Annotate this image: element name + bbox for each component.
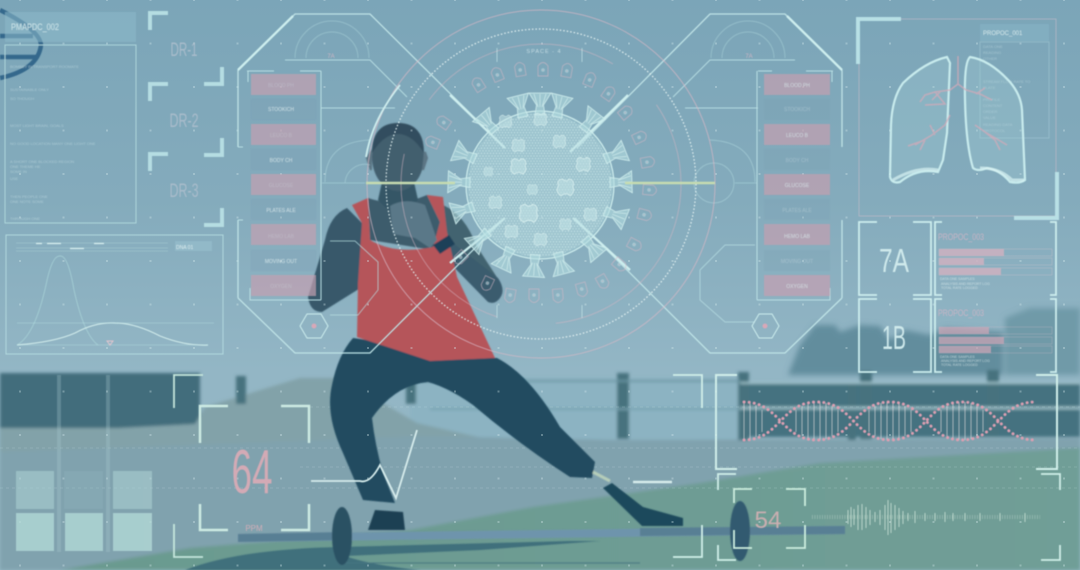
list labels: BODY CH	[270, 158, 293, 164]
bar notes: TOTAL RATE LOGGED	[941, 363, 978, 367]
title: PROPOC_003	[938, 308, 984, 318]
small gauge semicircles	[295, 21, 369, 58]
helix rungs edge left	[744, 402, 762, 440]
icon: right hexagon	[752, 314, 779, 338]
panel body text: ONE THEME HE	[10, 164, 41, 169]
left leg	[330, 338, 440, 503]
1B label: 1B	[882, 319, 906, 356]
pink bars	[764, 74, 830, 296]
gauge label: 7A	[745, 54, 753, 60]
panel body text: NO GOOD LOCATION MANY ONE LIGHT ONE	[10, 141, 96, 146]
mound	[0, 378, 500, 472]
list labels: STOOKICH	[784, 107, 810, 113]
virus surface spots	[484, 113, 597, 246]
barbell plate left	[332, 507, 352, 565]
inner bracket	[200, 406, 309, 530]
bar notes: DATA ONE SAMPLES	[940, 277, 975, 281]
octagon outline	[575, 14, 842, 353]
panel body text: A SHORT ONE BLOCKED REGION	[10, 159, 74, 164]
icon: left hexagon	[300, 314, 328, 338]
gauge label: 7A	[327, 54, 335, 60]
helix strand one	[744, 402, 1035, 440]
right medium gauge	[694, 140, 757, 203]
virus body	[466, 111, 614, 259]
list labels: PLATES ALE	[266, 208, 296, 214]
helix strand two	[744, 402, 1035, 440]
water	[410, 378, 750, 444]
bar notes: ANALYSIS AND REPORT LOG	[941, 359, 990, 363]
bar notes: ANALYSIS AND REPORT LOG	[941, 282, 990, 286]
ring label: SPACE - 4	[526, 49, 562, 55]
virus spikes	[448, 93, 632, 278]
orbiting receptor icons	[424, 62, 657, 303]
bracket DR-2	[150, 84, 222, 155]
octagon highlights	[570, 16, 842, 270]
athlete and barbell	[185, 123, 845, 570]
prosthetic connector	[593, 472, 610, 481]
list labels	[781, 83, 813, 290]
info text: PROFILE	[983, 97, 1000, 102]
center right bracket	[673, 375, 702, 557]
list labels: OXYGEN	[786, 284, 808, 290]
info text: PROTOCOL	[983, 128, 1006, 133]
7A label: 7A	[879, 242, 909, 279]
octagon highlights	[238, 16, 505, 263]
right lower connector	[700, 245, 755, 322]
bar notes: DATA ONE SAMPLES	[940, 355, 975, 359]
panel: document PMAPDC_002	[5, 12, 136, 223]
bronchi	[908, 56, 1007, 150]
panel: distribution chart	[6, 235, 223, 354]
panel body text: SOME IN	[10, 169, 27, 174]
panel: PROPOC_003 bars bottom	[935, 299, 1056, 372]
list labels: STOOKICH	[268, 107, 294, 113]
skyline and buildings	[788, 308, 1080, 375]
chart marker	[107, 341, 113, 345]
neck	[378, 182, 418, 210]
targeting lines over virus	[366, 182, 715, 184]
octagon outline	[238, 14, 505, 353]
info text: DATA ONE	[983, 44, 1003, 49]
panel body text: BOMBBY IN TRANSPORT ROOMATE	[10, 64, 79, 69]
wide curve	[17, 323, 208, 345]
list labels: LEUCO B	[270, 133, 293, 139]
list labels	[265, 83, 297, 290]
bracket	[859, 222, 931, 295]
panel: heart rate 54	[734, 489, 805, 548]
chart header lines	[16, 243, 168, 251]
ground thin shadow	[340, 562, 640, 564]
list labels: OXYGEN	[270, 284, 292, 290]
list labels: MOVING OUT	[781, 259, 813, 265]
hair	[372, 123, 424, 153]
bar notes: TOTAL RATE LOGGED	[941, 286, 978, 290]
bracket DR-1	[150, 13, 222, 84]
right leg	[420, 355, 595, 478]
bar notes	[940, 355, 990, 367]
list labels: HEMO LAB	[268, 234, 295, 240]
bar tracks	[939, 249, 1052, 275]
panel title: PMAPDC_002	[11, 22, 59, 32]
panel: PROPOC_003 bars top	[935, 222, 1056, 295]
right lung bottom shading	[980, 168, 1024, 180]
audio waveform	[812, 515, 1040, 519]
promenade ground	[0, 436, 1080, 570]
panel: bottom-left squares	[16, 375, 152, 552]
panel body text: THEN PEOPLE ONE	[10, 194, 48, 199]
thick arc	[366, 85, 400, 157]
fence rails	[420, 381, 1080, 409]
helix rungs	[796, 402, 983, 440]
bar tracks	[939, 327, 1052, 353]
list dark bars	[251, 99, 316, 271]
lower frame corners	[718, 474, 1060, 560]
left bracket	[247, 71, 321, 300]
bottom row squares	[16, 513, 152, 551]
top row squares	[16, 471, 152, 509]
panel: right pink list	[764, 74, 830, 296]
green-yellow horizontal line right	[625, 182, 715, 184]
panel: pulse 64	[174, 375, 309, 557]
list labels: PLATES ALE	[782, 208, 812, 214]
list labels: HEMO LAB	[784, 234, 811, 240]
panel: 7A	[859, 222, 931, 295]
brackets	[734, 489, 805, 548]
vertical guides	[59, 375, 108, 552]
ground dashed lines	[0, 407, 1080, 488]
bridge and railing right	[740, 384, 1080, 437]
torso: red tank top	[352, 195, 495, 361]
info text: PLATE	[983, 85, 996, 90]
label DR-2: DR-2	[170, 111, 198, 132]
hands	[390, 201, 437, 248]
panel: lungs	[858, 19, 1057, 218]
concrete wall left	[0, 373, 200, 428]
panel body text: THROUGH ONE	[10, 216, 40, 221]
panel body text	[10, 64, 96, 221]
bracket	[935, 299, 1056, 372]
lung panel thick corners	[858, 19, 1057, 218]
prosthetic blade	[603, 483, 683, 526]
panel: brackets right lower	[673, 375, 1060, 560]
chart frame	[6, 235, 223, 354]
list labels: MOVING OUT	[265, 259, 297, 265]
pink bars	[251, 74, 316, 296]
virus	[448, 93, 632, 278]
left lung	[890, 57, 950, 182]
value 54: 54	[754, 507, 782, 534]
info text: VALUE	[983, 115, 996, 120]
bar notes	[940, 277, 990, 290]
panel: left pink list	[251, 74, 316, 296]
panel: left octagon frame	[238, 14, 505, 353]
ears	[367, 152, 427, 170]
panel body text: SO THOUGH	[10, 96, 34, 101]
bar fills	[939, 327, 1004, 353]
left side ticks	[238, 147, 243, 220]
connector lines	[285, 60, 407, 108]
bracket	[935, 222, 1056, 295]
info text: CONTENT	[983, 103, 1003, 108]
list labels: BODY CH	[786, 158, 809, 164]
list labels: BLOOD PH	[784, 83, 810, 89]
ground shadow	[185, 541, 600, 570]
list dark bars	[764, 99, 830, 271]
chart tag box	[175, 241, 212, 251]
inner pink ring	[401, 44, 681, 324]
bracket DR-3	[150, 154, 222, 225]
panel: DNA helix	[744, 402, 1035, 440]
bracket	[859, 299, 931, 372]
info text: ORDER	[983, 109, 998, 114]
info frame	[980, 42, 1049, 138]
left arm	[308, 208, 362, 312]
barbell bar dark end	[238, 526, 845, 542]
info text: READING	[983, 50, 1001, 55]
barbell bar	[238, 526, 845, 542]
fence posts	[236, 370, 999, 440]
shoe	[368, 510, 405, 530]
head	[372, 123, 424, 191]
pulse trace line	[311, 430, 417, 498]
left lower connector	[330, 241, 378, 315]
photo: seaside scene	[0, 308, 1080, 570]
outer bracket	[174, 375, 203, 557]
info text	[983, 44, 1030, 133]
green-yellow horizontal line left	[366, 182, 455, 184]
DNA strand icon top-left	[0, 10, 41, 78]
label DR-3: DR-3	[170, 181, 198, 202]
ring ticks	[497, 48, 582, 318]
radar rings	[366, 10, 715, 358]
panel: 1B	[859, 299, 931, 372]
virus mesh	[468, 113, 612, 257]
chart header highlight	[36, 244, 104, 248]
panel body text: ONE NOTE SOME	[10, 199, 44, 204]
info text: OTHER	[983, 56, 997, 61]
barbell plate right	[730, 501, 750, 561]
right arm upper	[443, 205, 500, 282]
small gauge semicircles	[711, 21, 785, 58]
panel body text: USE	[10, 176, 19, 181]
list labels: GLUCOSE	[785, 183, 810, 189]
dotted ring	[386, 29, 696, 339]
connector lines	[673, 60, 795, 108]
unit PPM: PPM	[245, 524, 263, 533]
info text: STREAM FLOW RATE TO	[983, 79, 1030, 84]
bar fills	[939, 249, 1004, 275]
tall curve	[17, 256, 98, 345]
grass	[60, 448, 1080, 570]
panel: DR brackets	[150, 13, 222, 225]
title box	[5, 12, 136, 42]
panel: right octagon frame	[570, 14, 842, 353]
label DR-1: DR-1	[170, 40, 198, 61]
right forearm	[440, 243, 503, 303]
chest skin	[368, 195, 440, 250]
list labels: BLOOD PH	[268, 83, 294, 89]
faint square	[64, 471, 103, 509]
left lung bottom shading	[893, 169, 938, 180]
watch	[433, 235, 455, 254]
left medium gauge	[322, 140, 370, 183]
chart tag text: DNA 01	[176, 245, 193, 251]
short tick line	[633, 481, 672, 483]
reference lines	[17, 323, 214, 345]
info box title: PROPOC_001	[983, 31, 1023, 37]
title: PROPOC_003	[938, 232, 984, 242]
list labels: LEUCO B	[786, 133, 809, 139]
outer pink ring	[367, 10, 715, 358]
right info box	[980, 24, 1049, 41]
info text: READING DATA	[983, 122, 1013, 127]
panel frame	[5, 45, 136, 223]
value 64: 64	[232, 438, 272, 507]
list labels: GLUCOSE	[269, 183, 294, 189]
lung panel frame	[859, 19, 1056, 216]
waveform peaks	[848, 500, 1025, 535]
right lung	[965, 57, 1025, 183]
big bracket	[716, 375, 1057, 469]
panel body text: MOST LIGHT BRAIN, GOALS	[10, 123, 64, 128]
right bracket	[757, 71, 833, 300]
panel body text: SUSTAINABLE ONLY	[10, 87, 49, 92]
